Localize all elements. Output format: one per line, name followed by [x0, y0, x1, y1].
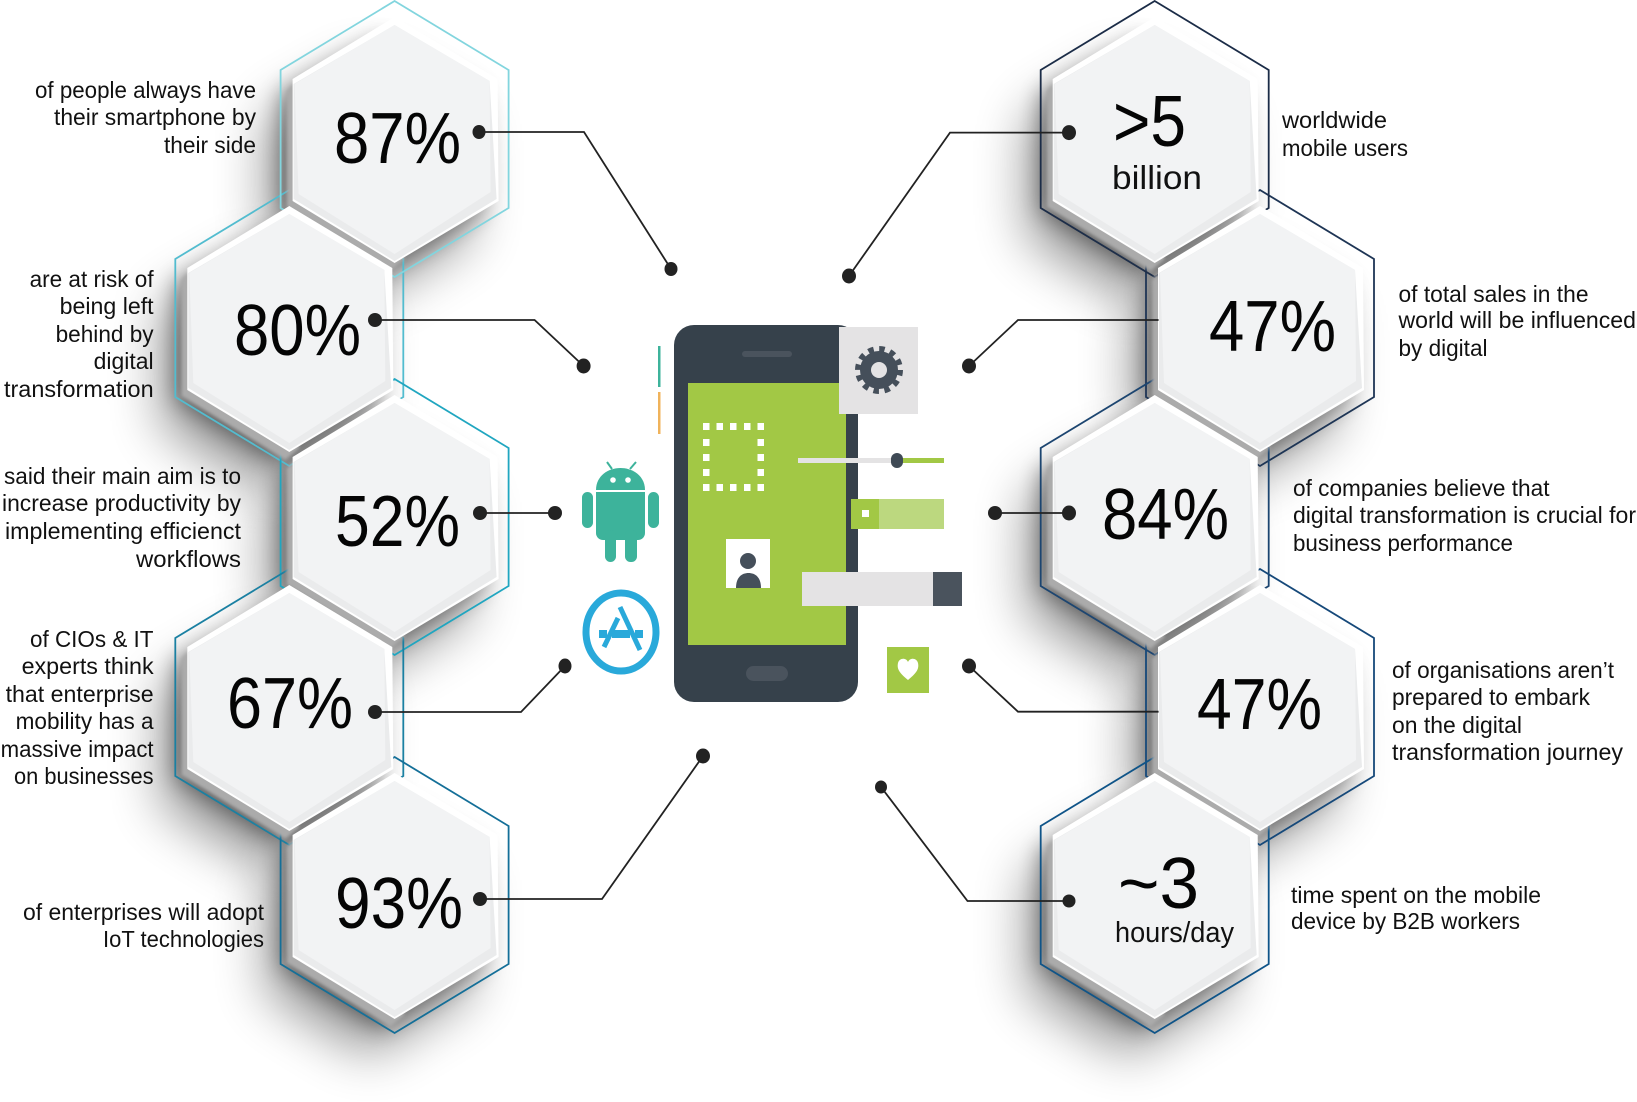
text: 67% description [1, 626, 154, 789]
outline: 84% hexagon [1041, 379, 1269, 655]
connector: ~3 hours/day [875, 780, 1076, 908]
text: 80% description: being left [60, 293, 154, 319]
outline: right 47% lower hexagon [1146, 569, 1374, 845]
text: right 47% lower description: of organisations aren’t [1392, 657, 1615, 683]
text: ~3 hours/day description: device by B2B workers [1291, 908, 1520, 934]
text: 52% description: workflows [135, 546, 241, 572]
text: 84% description: digital transformation is crucial for [1293, 502, 1636, 528]
phone body [674, 325, 858, 702]
text: right 47% upper description: of total sales in the [1398, 281, 1588, 307]
outline: right 47% upper hexagon [1146, 190, 1374, 466]
hexagon: >5 billion: >5 [1113, 82, 1186, 162]
text: 84% description [1293, 475, 1636, 556]
text: >5 billion description [1281, 107, 1408, 161]
text: >5 billion description: mobile users [1282, 135, 1408, 161]
text: 93% description: of enterprises will adopt [23, 899, 265, 925]
text: 52% description: said their main aim is to [4, 463, 241, 489]
text: 84% description: business performance [1293, 530, 1513, 556]
grey bar [802, 572, 962, 606]
dashed selection square [703, 423, 764, 491]
text: right 47% upper description: by digital [1398, 335, 1488, 361]
profile photo tile [726, 539, 770, 588]
hexagon: right 47% upper: 47% [1209, 287, 1336, 367]
gear tile [839, 327, 918, 414]
hexagon: 93% [287, 773, 499, 1027]
hexagon: 52% [287, 395, 499, 649]
connector: 67% [368, 658, 572, 719]
text: ~3 hours/day description [1291, 882, 1541, 934]
connector: 52% [473, 506, 562, 520]
text: right 47% lower description: transformation journey [1392, 739, 1623, 765]
connector: 80% [368, 313, 591, 374]
text: 52% description: increase productivity by [2, 490, 241, 516]
text: 93% description [23, 899, 265, 952]
outline: 93% hexagon [281, 757, 509, 1033]
text: 67% description: that enterprise [6, 681, 154, 707]
hexagon: 84% [1047, 395, 1259, 649]
connector: 84% [988, 506, 1076, 520]
outline: 52% hexagon [281, 379, 509, 655]
text: 80% description: transformation [4, 376, 154, 402]
icon: app store [586, 593, 656, 671]
hexagon: >5 billion [1041, 1, 1269, 277]
text: ~3 hours/day description: time spent on the mobile [1291, 882, 1541, 908]
text: 67% description: on businesses [14, 763, 154, 789]
hexagon: 67% [181, 585, 393, 839]
outline: ~3 hexagon [1041, 757, 1269, 1033]
text: right 47% lower description [1392, 657, 1623, 765]
text: 67% description: mobility has a [16, 708, 154, 734]
outline: 80% hexagon [175, 190, 403, 466]
phone home button [746, 666, 788, 681]
phone screen [688, 383, 846, 645]
text: 80% description: digital [94, 348, 154, 374]
text: 52% description [2, 463, 242, 572]
text: right 47% upper description [1397, 281, 1636, 361]
text: right 47% lower description: prepared to embark [1392, 684, 1590, 710]
green toggle bar [851, 499, 944, 529]
text: 67% description: massive impact [1, 736, 154, 762]
hexagon: ~3 hours/day [1047, 773, 1259, 1027]
text: right 47% lower description: on the digital [1392, 712, 1522, 738]
connector: 87% [472, 125, 678, 276]
hexagon: right 47% lower: 47% [1197, 665, 1322, 745]
text: 93% description: IoT technologies [103, 926, 264, 952]
text: 67% description: of CIOs & IT [30, 626, 154, 652]
hexagon: 84%: 84% [1102, 475, 1229, 555]
hexagon: >5 billion: billion [1112, 159, 1202, 196]
connector: 93% [473, 748, 710, 906]
connector: right 47% lower [962, 658, 1159, 712]
outline: 67% hexagon [175, 569, 403, 845]
icon: android robot [582, 462, 659, 562]
text: 87% description [35, 77, 256, 158]
phone speaker [742, 351, 792, 357]
decorative accent bars beside phone [658, 346, 660, 434]
hexagon: 52%: 52% [335, 482, 460, 562]
hexagon: right 47% lower [1152, 585, 1364, 839]
hexagon: 87% [281, 1, 509, 277]
text: 80% description: behind by [56, 321, 154, 347]
text: right 47% upper description: world will be influenced [1397, 307, 1636, 333]
connector: >5 billion [842, 125, 1076, 284]
text: 52% description: implementing efficienct [5, 518, 242, 544]
hexagon: 87%: 87% [334, 99, 461, 179]
hexagon: ~3 hours/day: hours/day [1115, 917, 1234, 949]
text: 80% description: are at risk of [30, 266, 154, 292]
text: >5 billion description: worldwide [1281, 107, 1387, 133]
text: 87% description: of people always have [35, 77, 256, 103]
hexagon: right 47% upper [1152, 206, 1364, 460]
slider [798, 453, 944, 468]
hexagon: ~3 hours/day: ~3 [1118, 844, 1199, 924]
hexagon: 80% [181, 206, 393, 460]
hexagon: 93%: 93% [335, 864, 463, 944]
text: 84% description: of companies believe that [1293, 475, 1550, 501]
hexagon: 80%: 80% [234, 291, 361, 371]
phone illustration [674, 325, 962, 702]
text: 80% description [4, 266, 154, 402]
text: 87% description: their side [164, 132, 256, 158]
heart tile [887, 647, 929, 693]
text: 67% description: experts think [22, 653, 154, 679]
hexagon drop shadows [162, 37, 1348, 1055]
hexagon: 67%: 67% [227, 664, 353, 744]
text: 87% description: their smartphone by [54, 104, 256, 130]
connector: right 47% upper [962, 320, 1159, 374]
